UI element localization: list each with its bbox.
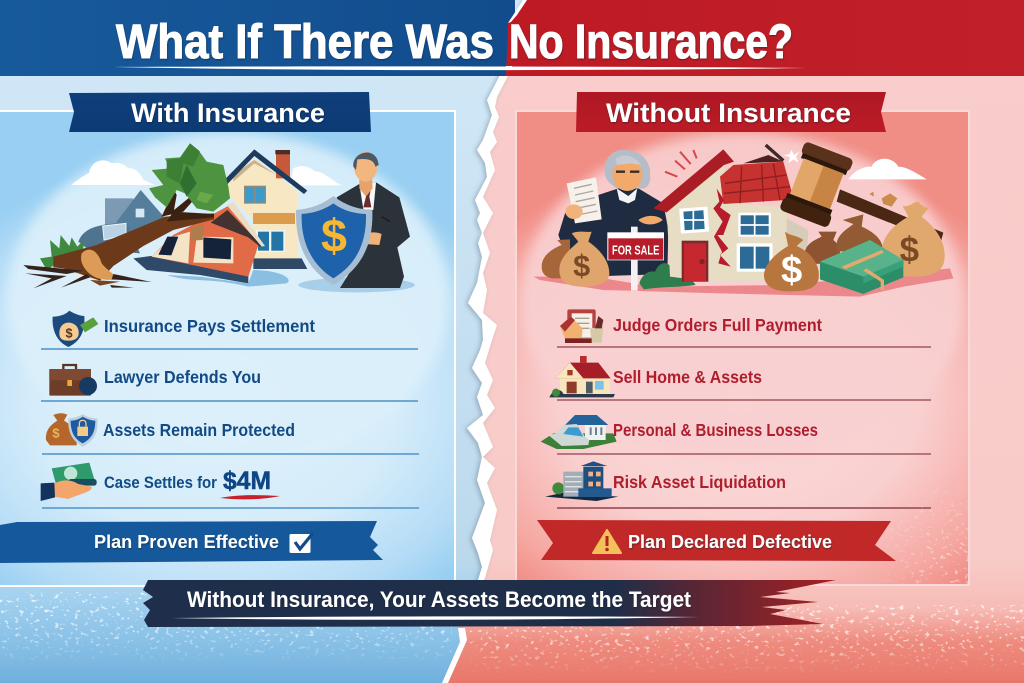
row: assets remain protected <box>46 413 295 447</box>
fern <box>40 235 83 270</box>
header band <box>0 0 1024 76</box>
heading text: Without Insurance <box>606 98 851 128</box>
row: sell home and assets <box>549 356 762 397</box>
frost: right panel corner <box>870 470 968 584</box>
shield with dollar sign <box>296 196 372 285</box>
label: Risk Asset Liquidation <box>613 472 786 492</box>
frost: lower right <box>470 605 1024 675</box>
title underline <box>114 66 806 70</box>
row: lawyer defends you <box>49 365 261 396</box>
heading banner: without insurance <box>576 92 886 132</box>
row: case settles for 4M <box>41 463 280 501</box>
collapsed house <box>133 202 265 283</box>
bottom banner <box>143 580 836 627</box>
icon: money bag and lock shield: $ <box>52 425 60 440</box>
heading text: With Insurance <box>131 98 325 128</box>
ground shadow <box>533 268 953 297</box>
icon: hand holding cash <box>41 463 97 501</box>
panel: without insurance <box>516 111 969 585</box>
title: No Insurance? <box>509 16 793 69</box>
money bags left: $ <box>573 249 590 283</box>
divider line <box>557 453 931 455</box>
label: Judge Orders Full Payment <box>613 315 822 335</box>
tree trunk <box>23 183 214 288</box>
label: Assets Remain Protected <box>103 420 295 440</box>
for sale sign <box>607 227 664 291</box>
ribbon: plan declared defective <box>537 520 896 561</box>
label: Lawyer Defends You <box>104 367 261 387</box>
frost: lower left <box>0 592 452 664</box>
tree foliage <box>149 143 230 212</box>
icon: shield with money bag <box>53 311 98 347</box>
back money bags <box>805 214 883 264</box>
amount: $4M: $4M <box>223 467 271 495</box>
cloud right <box>290 166 342 185</box>
gavel <box>779 141 943 243</box>
crumbs <box>869 192 897 207</box>
divider line <box>41 348 418 350</box>
icon: court order document <box>560 309 603 343</box>
torn paper divider <box>467 0 527 590</box>
for sale sign: FOR SALE <box>612 242 660 257</box>
heading banner: with insurance <box>69 92 371 132</box>
divider line <box>42 507 419 509</box>
torn paper divider: lower edge <box>442 628 467 683</box>
money bags left <box>542 232 609 287</box>
consequences list <box>541 309 931 509</box>
money bag right: $ <box>900 231 919 270</box>
divider line <box>557 507 931 509</box>
row: insurance pays settlement <box>53 311 315 347</box>
cloud left <box>71 160 155 185</box>
divider line <box>42 453 419 455</box>
icon: shield with money bag: $ <box>65 326 73 340</box>
label: Personal & Business Losses <box>613 420 818 440</box>
title: What If There Was <box>116 16 494 69</box>
lawyer in suit <box>298 152 415 292</box>
benefits list <box>41 311 419 509</box>
bush <box>639 263 696 289</box>
row: judge orders full payment <box>560 309 822 343</box>
ribbon label: Plan Declared Defective <box>628 531 832 552</box>
background neighbour house <box>78 190 167 253</box>
background: with insurance side <box>0 0 525 683</box>
icon: buildings <box>545 461 618 501</box>
judge <box>558 150 668 277</box>
water and ground <box>167 270 289 287</box>
cash stack <box>820 240 903 294</box>
title <box>116 16 793 69</box>
sparkle <box>783 150 799 163</box>
ribbon: plan proven effective <box>0 521 383 563</box>
divider line <box>557 399 931 401</box>
illustration: fallen tree on house with lawyer and shield <box>23 143 415 292</box>
money bag front: $ <box>781 249 802 292</box>
icon: money bag and lock shield <box>46 413 98 447</box>
ribbon label: Plan Proven Effective <box>94 531 279 552</box>
icon: house and car <box>541 415 617 449</box>
money bag right <box>882 202 945 277</box>
damaged house <box>653 145 808 282</box>
icon: house <box>549 356 615 397</box>
row: personal and business losses <box>541 415 818 449</box>
red underline <box>220 495 280 499</box>
main house <box>222 149 307 269</box>
label: Case Settles for <box>104 473 217 492</box>
shield with dollar sign: $ <box>321 210 347 262</box>
row: risk asset liquidation <box>545 461 786 501</box>
cloud <box>848 159 927 179</box>
bottom banner underline <box>171 616 699 620</box>
label: Insurance Pays Settlement <box>104 316 315 336</box>
icon: check box <box>290 533 313 553</box>
label: Sell Home & Assets <box>613 367 762 387</box>
illustration: judge, damaged for-sale house, gavel and money <box>533 141 953 297</box>
divider line <box>557 346 931 348</box>
money bag front <box>764 232 819 292</box>
icon: warning triangle <box>593 530 621 553</box>
bottom banner text: Without Insurance, Your Assets Become the Target <box>187 587 692 612</box>
divider line <box>41 400 418 402</box>
impact marks <box>665 150 697 177</box>
icon: briefcase <box>49 365 97 396</box>
panel: with insurance <box>0 111 455 586</box>
